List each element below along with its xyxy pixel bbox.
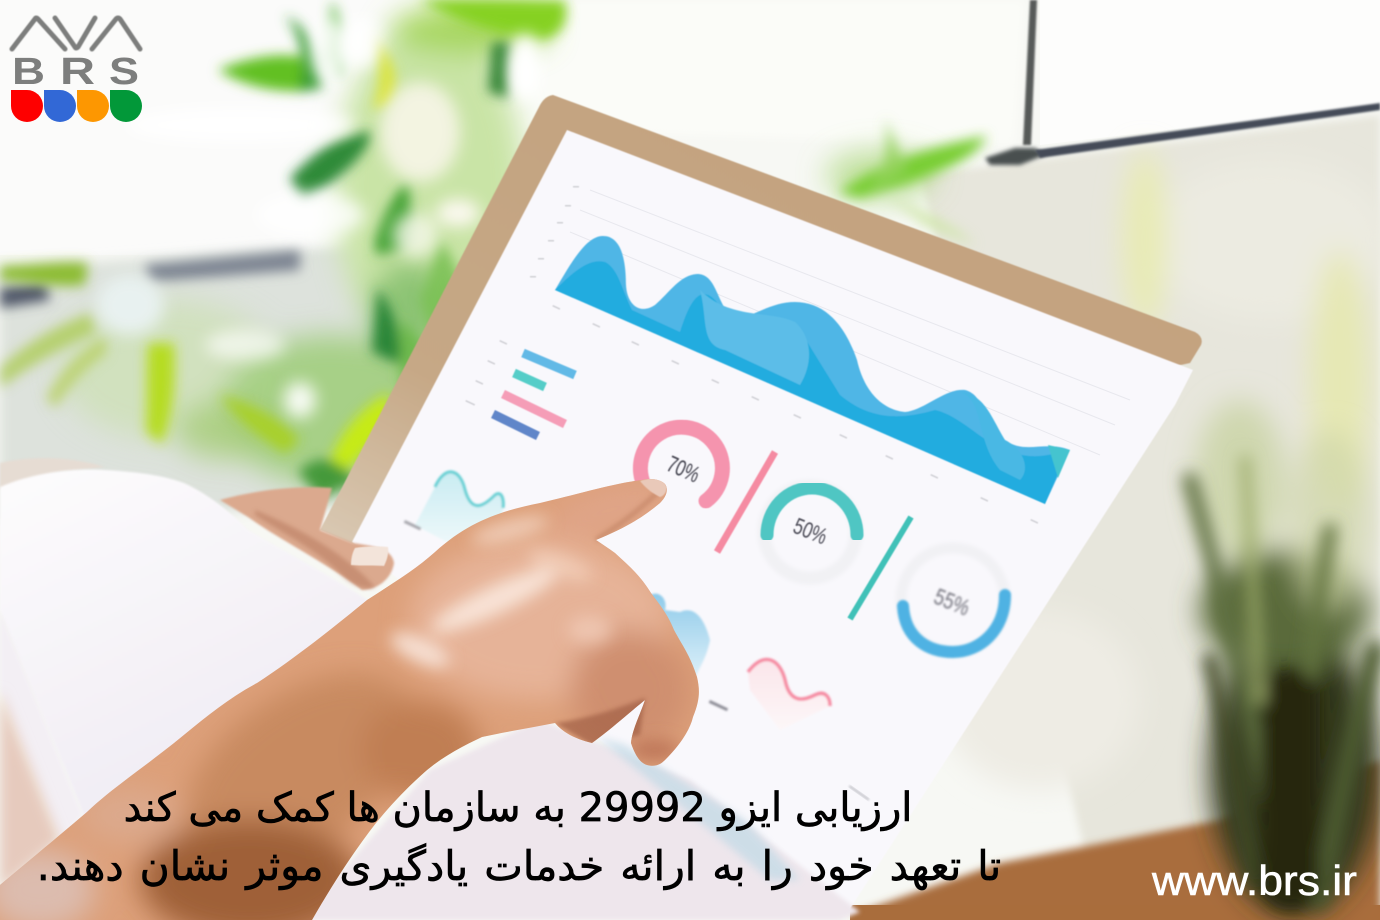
logo letters: B [12, 51, 45, 93]
paper sheet [352, 130, 1193, 915]
logo mark [12, 18, 140, 49]
open notebook page [0, 458, 375, 890]
logo letters: R [60, 51, 95, 93]
chart grid lines [570, 190, 1130, 455]
teal sparkline [404, 472, 503, 560]
divider pink [717, 452, 775, 552]
horizontal bars [493, 353, 575, 436]
pink sparkline [709, 660, 830, 730]
caption text: تا تعهد خود را به ارائه خدمات یادگیری موثر نشان دهند. [37, 842, 1001, 890]
chart axis labels [465, 186, 1038, 524]
area chart [555, 236, 1070, 504]
logo [11, 18, 142, 122]
logo letters [12, 51, 139, 93]
hand pointing with arm [0, 470, 720, 920]
donut 70%: 70% [663, 450, 704, 488]
lower paper page [300, 720, 860, 920]
fingernail [640, 479, 667, 497]
window frame [985, 0, 1380, 165]
website url: www.brs.ir [1151, 857, 1357, 904]
wall bright patches [940, 150, 1380, 790]
divider teal [850, 517, 911, 619]
logo letters: S [109, 51, 139, 93]
donut 70% [640, 427, 722, 501]
blurred grass plant right [1190, 400, 1380, 915]
second hand holding clipboard [220, 487, 394, 590]
notebook side band [0, 610, 83, 840]
caption text [37, 785, 1001, 890]
clipboard board [320, 95, 1202, 545]
thumbnail [351, 546, 388, 566]
blue chart behind hand [640, 594, 710, 690]
logo drops [11, 90, 142, 122]
donut 50% [764, 486, 857, 578]
donut 50%: 50% [790, 513, 831, 549]
table surface [850, 760, 1380, 915]
caption text: ارزیابی ایزو 29992 به سازمان ها کمک می کند [124, 785, 912, 831]
donut 55%: 55% [930, 583, 974, 621]
blue strip on paper edge [597, 737, 800, 880]
hand highlights [386, 510, 680, 760]
blurred green plant left [0, 0, 987, 498]
leaf [218, 55, 312, 91]
donut 55% [901, 548, 1005, 652]
